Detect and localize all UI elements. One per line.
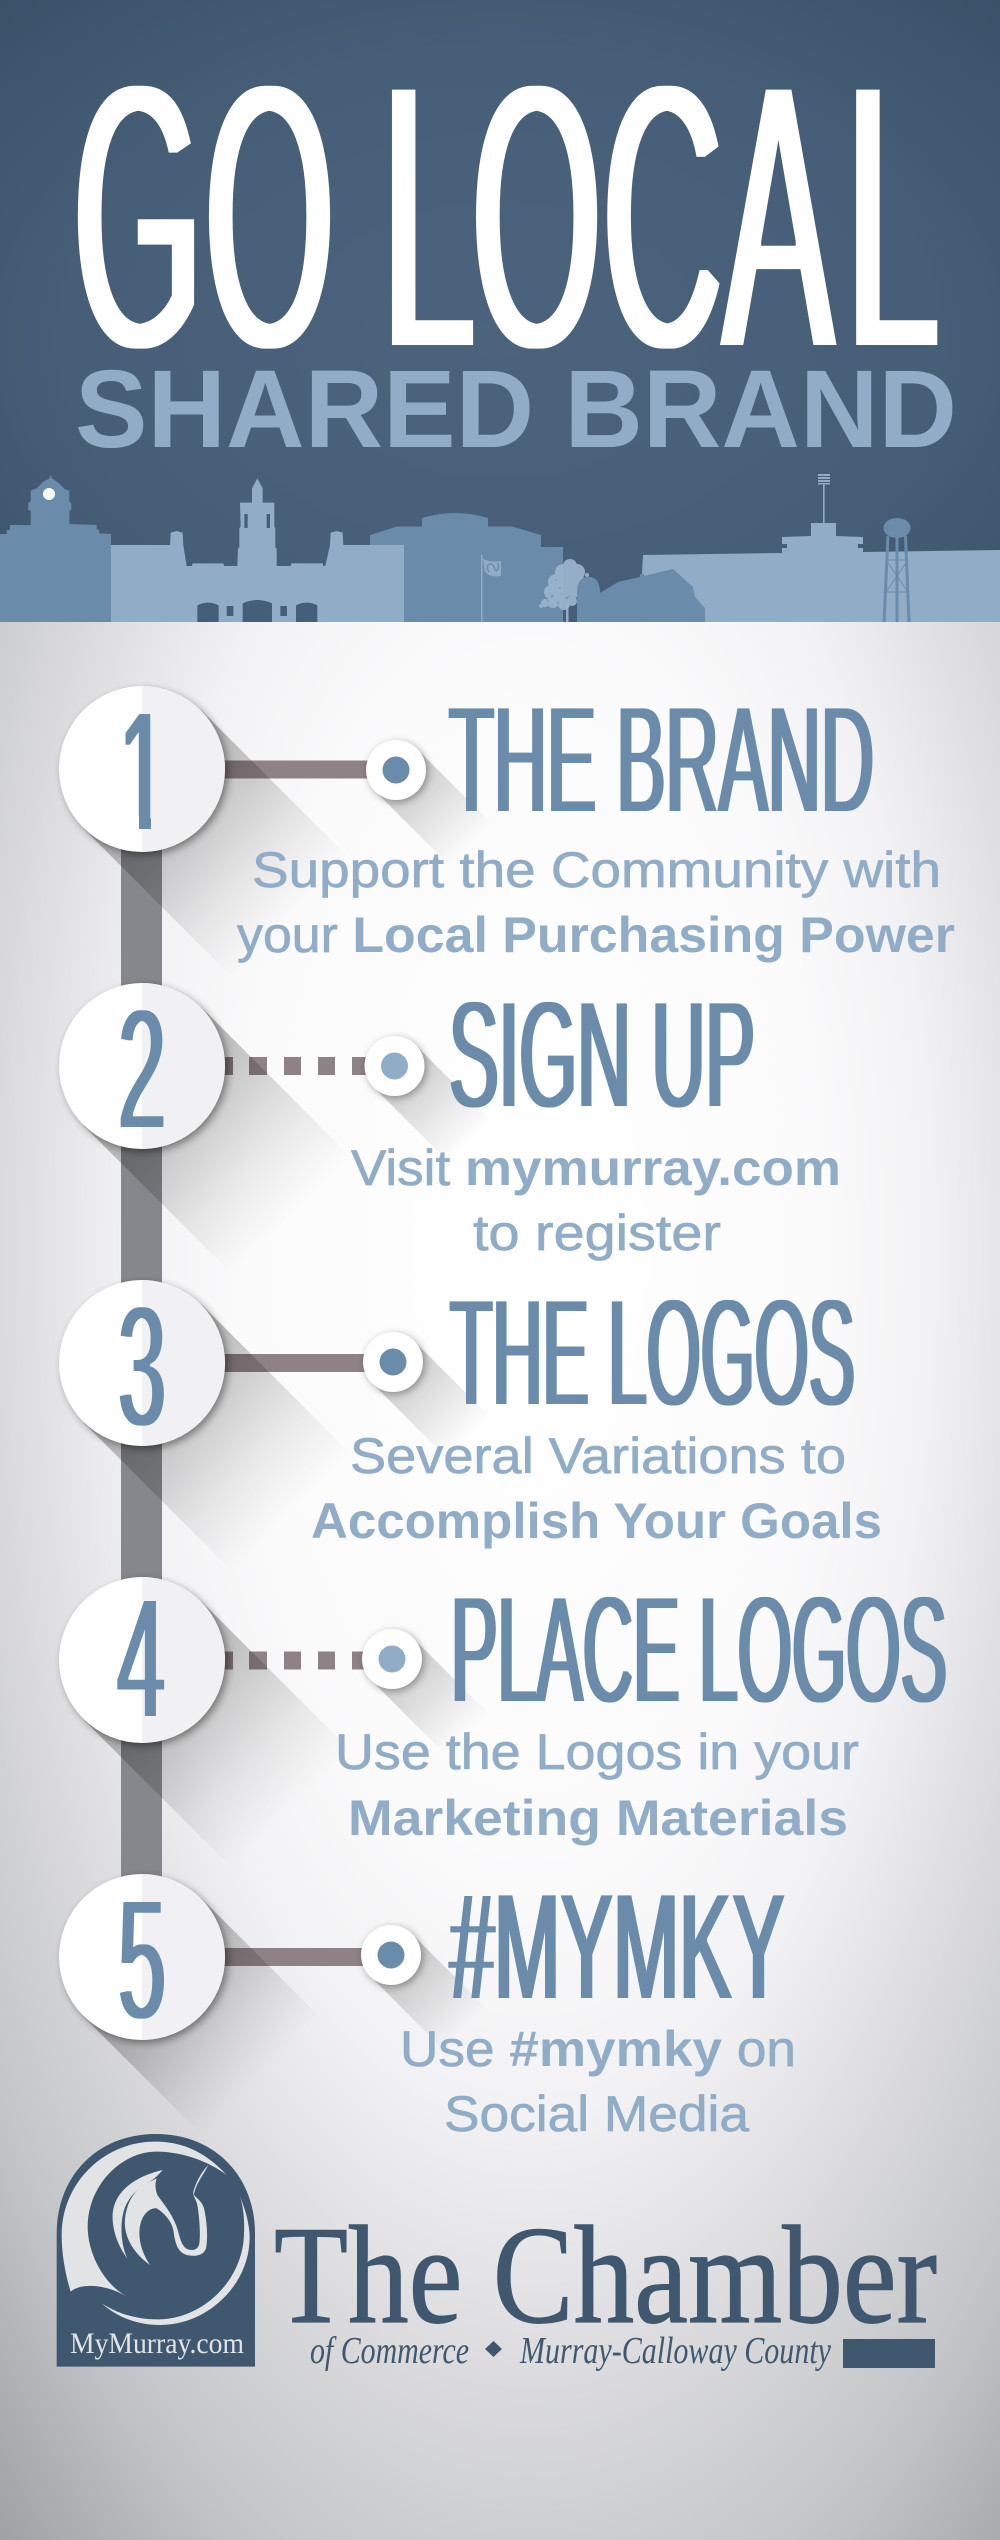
bar [843, 2339, 935, 2368]
text block 2 [351, 1140, 841, 1261]
horse head [113, 2165, 208, 2265]
stadium light [818, 474, 830, 523]
connector dot 1 [366, 740, 428, 802]
number circle 5 [59, 1865, 228, 2055]
number circle 1: 1 [119, 677, 167, 867]
connector dot 4 [362, 1629, 424, 1691]
text block 1: Support the Community with [252, 842, 941, 898]
text block 4 [335, 1724, 859, 1846]
text block 3: Several Variations to [350, 1428, 846, 1484]
connector 4: dashed [224, 1652, 364, 1670]
text block 1 [237, 842, 955, 963]
number circle 5: 5 [118, 1865, 166, 2055]
text block 1: your Local Purchasing Power [237, 907, 955, 963]
number circle 2: 2 [118, 975, 166, 1165]
connector 3: solid [224, 1354, 370, 1372]
text block 5 [400, 2021, 796, 2142]
text block 4: Use the Logos in your [335, 1724, 859, 1780]
water tower [884, 518, 910, 622]
text block 5: Use #mymky on [400, 2021, 796, 2077]
header band [0, 0, 1000, 622]
diamond [485, 2341, 502, 2357]
connector dot 3 [363, 1332, 425, 1394]
text block 2: Visit mymurray.com [351, 1140, 841, 1196]
title: GO LOCAL: GO LOCAL [73, 5, 939, 427]
number circle 4: 4 [117, 1564, 165, 1754]
skyline [0, 474, 1000, 622]
step 1 [59, 675, 955, 963]
building: domed auditorium [370, 513, 563, 622]
connector dot 5 [361, 1925, 423, 1987]
number circle 3 [59, 1272, 228, 1462]
text block 2: to register [473, 1205, 721, 1261]
number circle 1 [59, 677, 228, 867]
building: courthouse with clock [0, 475, 111, 622]
connector 1: solid [224, 760, 370, 778]
building: twin-gabled hall with tower [111, 478, 404, 622]
step 5 [59, 1862, 796, 2142]
swoosh crescents [62, 2142, 250, 2325]
connector 5: solid [224, 1948, 370, 1966]
timeline vertical line [121, 769, 162, 1957]
barn and silo [577, 569, 705, 622]
MyMurray.com label: MyMurray.com [70, 2327, 244, 2360]
logo: MyMurray.com horse badge [57, 2134, 255, 2367]
text block 5: Social Media [444, 2086, 749, 2142]
number circle 2 [59, 975, 228, 1165]
text block 3: Accomplish Your Goals [311, 1493, 882, 1549]
page background [0, 622, 1000, 2540]
subtitle: SHARED BRAND: SHARED BRAND [75, 348, 957, 471]
text block 4: Marketing Materials [348, 1790, 848, 1846]
number circle 4 [59, 1564, 228, 1754]
step 3 [59, 1268, 882, 1549]
subline left: of Commerce [310, 2330, 469, 2372]
connector dot 2 [364, 1036, 426, 1098]
tree [539, 559, 589, 622]
step 2 [59, 970, 841, 1261]
text block 3 [311, 1428, 882, 1549]
building: right long block [642, 523, 1000, 622]
long shadows [83, 710, 492, 2166]
badge arch [57, 2134, 255, 2367]
step 4 [59, 1564, 947, 1846]
subline right: Murray-Calloway County [519, 2330, 831, 2372]
connector 2: dashed [224, 1057, 366, 1075]
number circle 3: 3 [118, 1272, 166, 1462]
flag and pole [481, 555, 501, 622]
